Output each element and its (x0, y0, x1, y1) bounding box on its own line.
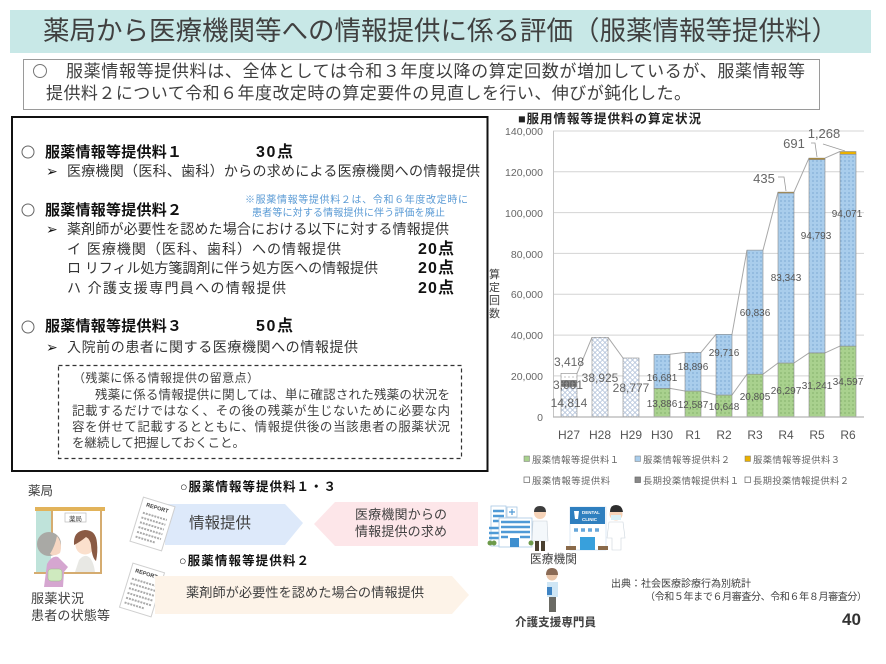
note: residual medication: 記載するだけではなく、その後の残薬が生じないために必要な内 (72, 403, 450, 418)
x axis labels: R3 (747, 428, 763, 442)
arrow: request from medical institution: 医療機関からの (355, 507, 447, 522)
data labels: 34,597 (833, 377, 864, 388)
y axis title (489, 267, 500, 320)
data labels: 3,001 (553, 378, 583, 392)
x axis labels: R1 (685, 428, 701, 442)
series connector lines (577, 152, 840, 395)
fee 2: ➢ (46, 221, 58, 237)
x axis labels: R2 (716, 428, 732, 442)
chart legend: 長期投薬情報提供料２ (753, 475, 849, 486)
arrow: request from medical institution: 情報提供の求め (355, 524, 447, 539)
icon: report document 1: REPORT (145, 502, 170, 515)
note: residual medication: （残薬に係る情報提供の留意点） (73, 370, 259, 385)
y axis: 100,000 (505, 208, 543, 220)
icon: dental clinic with dentist: CLINIC (582, 517, 598, 522)
data labels: 29,716 (709, 348, 740, 359)
source note (611, 577, 867, 603)
icon: report document 1 (130, 497, 175, 551)
chart legend: 長期投薬情報提供料１ (643, 475, 739, 486)
fee 2: ハ 介護支援専門員への情報提供 (67, 280, 286, 296)
fee 1: 服薬情報等提供料１ (45, 143, 182, 161)
note: residual medication: 容を併せて記載するとともに、情報提供後の当該患者の服薬状況 (72, 419, 450, 434)
data labels (551, 126, 864, 413)
source note: 出典：社会医療診療行為別統計 (611, 577, 751, 590)
fee 3: 50点 (256, 316, 293, 335)
y axis title: 定 (489, 281, 500, 294)
chart legend: 服薬情報等提供料１ (532, 454, 619, 465)
data labels: 3,418 (554, 355, 584, 369)
data labels: 20,805 (740, 392, 771, 403)
icon: hospital with doctor (488, 506, 548, 551)
chart legend: 服薬情報等提供料３ (753, 454, 840, 465)
data labels: 94,793 (801, 231, 832, 242)
x axis labels: H30 (651, 428, 673, 442)
data labels: 12,587 (678, 400, 709, 411)
data labels: 31,241 (802, 381, 833, 392)
summary text box: 服薬情報等提供料は、全体としては令和３年度以降の算定回数が増加しているが、服薬情報等 (66, 62, 805, 81)
data labels: 28,777 (613, 381, 650, 395)
care manager label: 介護支援専門員 (515, 615, 596, 629)
fee 3 (22, 316, 358, 355)
data labels: 435 (753, 171, 775, 186)
y axis: 0 (537, 412, 543, 424)
source note: （令和５年まで６月審査分、令和６年８月審査分） (645, 590, 867, 603)
icon: pharmacy counter: 薬局 (69, 514, 82, 523)
medical institution label: 医療機関 (530, 552, 577, 566)
heading: fee 2 flow: ○服薬情報等提供料２ (179, 553, 309, 568)
arrow: information provision (165, 504, 303, 545)
note: fee 2 abolished: 患者等に対する情報提供に伴う評価を廃止 (252, 206, 445, 219)
fee 3: ➢ (46, 339, 58, 355)
bar chart: calculation counts (489, 126, 864, 442)
icon: dental clinic with dentist: DENTAL (582, 510, 600, 515)
fee 2: ロ リフィル処方箋調剤に伴う処方医への情報提供 (67, 260, 378, 276)
icon: dental clinic with dentist (566, 505, 625, 550)
x axis labels: H28 (589, 428, 611, 442)
pharmacy label: 薬局 (28, 484, 53, 498)
fee 3: 服薬情報等提供料３ (45, 317, 182, 335)
y axis: 120,000 (505, 167, 543, 179)
fee 2: 薬剤師が必要性を認めた場合における以下に対する情報提供 (67, 221, 449, 237)
arrow: information provision: 情報提供 (189, 514, 251, 532)
x axis labels: H29 (620, 428, 642, 442)
panel: fee definitions (12, 117, 488, 471)
title: 薬局から医療機関等への情報提供に係る評価（服薬情報等提供料） (43, 16, 838, 46)
summary text box (24, 60, 820, 110)
patient status caption: 患者の状態等 (31, 608, 110, 623)
icon: care manager (546, 568, 558, 612)
fee 1 (22, 142, 480, 179)
bars (561, 152, 856, 417)
arrow: request from medical institution (314, 502, 478, 546)
leader lines (778, 143, 845, 191)
fee 2: 20点 (418, 239, 454, 258)
x axis labels: R4 (778, 428, 794, 442)
icon: report document 2: REPORT (134, 568, 159, 581)
data labels: 60,836 (740, 308, 771, 319)
summary text box: 提供料２について令和６年度改定時の算定要件の見直しを行い、伸びが鈍化した。 (46, 84, 691, 103)
note: residual medication: 残薬に係る情報提供に関しては、単に確認された残薬の状況を (95, 387, 450, 402)
fee 3: 入院前の患者に関する医療機関への情報提供 (67, 339, 358, 355)
x axis labels: R5 (809, 428, 825, 442)
fee 2: 20点 (418, 278, 454, 297)
y axis: 60,000 (511, 289, 543, 301)
patient status caption: 服薬状況 (31, 591, 84, 606)
fee 2: イ 医療機関（医科、歯科）への情報提供 (67, 241, 341, 257)
data labels: 10,648 (709, 402, 740, 413)
chart legend: 服薬情報等提供料 (532, 475, 610, 486)
data labels: 38,925 (582, 371, 619, 385)
note: fee 2 abolished (245, 193, 468, 219)
heading: fee 1 and 3 flow: ○服薬情報等提供料１・３ (180, 479, 336, 494)
x axis labels: R6 (840, 428, 856, 442)
data labels: 16,681 (647, 373, 678, 384)
x axis labels: H27 (558, 428, 580, 442)
fee 1: 医療機関（医科、歯科）からの求めによる医療機関への情報提供 (67, 163, 480, 179)
fee 2: 20点 (418, 258, 454, 277)
y axis (505, 126, 864, 424)
fee 1: ➢ (46, 163, 58, 179)
arrow: pharmacist judged provision (155, 576, 469, 614)
data labels: 26,297 (771, 386, 802, 397)
x axis labels (558, 428, 856, 442)
fee 1: 30点 (256, 142, 293, 161)
data labels: 691 (783, 136, 805, 151)
fee 2 (22, 201, 454, 297)
data labels: 94,071 (832, 209, 863, 220)
data labels: 1,268 (808, 126, 840, 141)
page number: 40 (842, 610, 861, 629)
y axis: 140,000 (505, 126, 543, 138)
note: residual medication: を継続して把握しておくこと。 (72, 435, 245, 450)
y axis title: 数 (489, 307, 500, 320)
chart legend (524, 454, 849, 486)
fee 2: 服薬情報等提供料２ (45, 201, 182, 219)
y axis: 80,000 (511, 249, 543, 261)
note: fee 2 abolished: ※服薬情報等提供料２は、令和６年度改定時に (245, 193, 468, 206)
data labels: 18,896 (678, 362, 709, 373)
arrow: pharmacist judged provision: 薬剤師が必要性を認めた場合の情報提供 (186, 585, 424, 600)
chart legend: 服薬情報等提供料２ (643, 454, 730, 465)
data labels: 14,814 (551, 396, 588, 410)
data labels: 13,886 (647, 399, 678, 410)
title (10, 10, 871, 53)
y axis title: 回 (489, 294, 500, 307)
data labels: 83,343 (771, 273, 802, 284)
chart title: ■服用情報等提供料の算定状況 (518, 111, 701, 126)
patient status caption (31, 591, 110, 623)
y axis: 20,000 (511, 371, 543, 383)
icon: pharmacy counter (34, 507, 105, 587)
y axis: 40,000 (511, 330, 543, 342)
y axis title: 算 (489, 267, 500, 281)
note: residual medication (58, 366, 462, 458)
icon: report document 2 (119, 563, 165, 617)
